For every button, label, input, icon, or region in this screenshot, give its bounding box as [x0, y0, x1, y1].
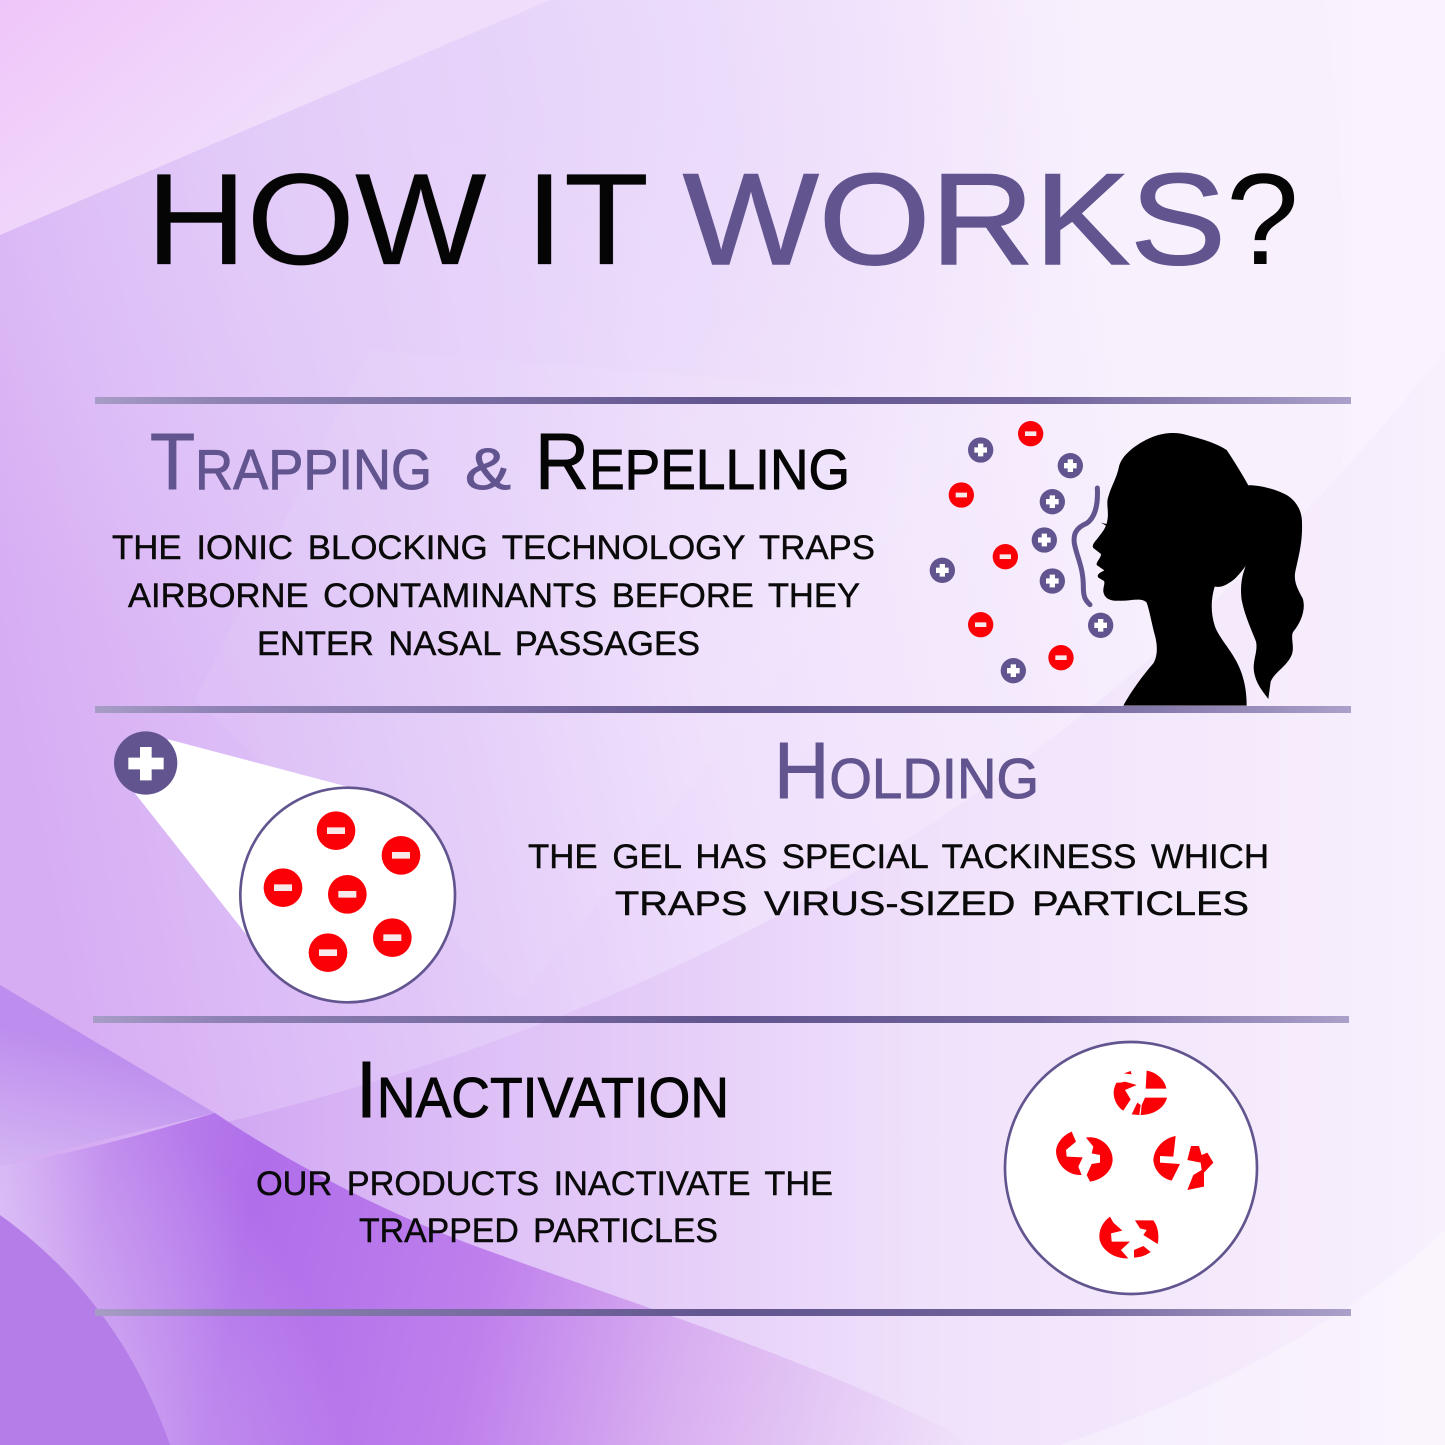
- particles: negative charges: [949, 421, 1074, 670]
- containing circle: [1005, 1042, 1257, 1294]
- title: [146, 146, 1299, 292]
- divider 1: [95, 397, 1351, 404]
- panel: trapping and repelling: [112, 417, 1304, 706]
- heading: holding: HOLDING: [774, 726, 1039, 815]
- text block: gel description: THE GEL HAS SPECIAL TACKINESS WHICH: [528, 838, 1269, 876]
- fragments: right particle: [1153, 1136, 1213, 1190]
- panel: inactivation: [256, 1042, 1257, 1294]
- icon: large positive charge: [114, 731, 177, 795]
- divider 2: [95, 706, 1351, 713]
- illustration: broken particles: [1005, 1042, 1257, 1294]
- heading: trapping and repelling: TRAPPING: [150, 417, 432, 506]
- text block: ionic blocking description: [112, 529, 875, 663]
- text block: ionic blocking description: AIRBORNE CONTAMINANTS BEFORE THEY: [128, 577, 860, 615]
- magnifier cone: [135, 739, 350, 935]
- heading: trapping and repelling: REPELLING: [535, 417, 850, 506]
- divider 3: [93, 1016, 1349, 1023]
- title: HOW IT: [146, 146, 649, 292]
- heading: trapping and repelling: &: [465, 437, 511, 502]
- fragments: top particle: [1114, 1071, 1167, 1115]
- icon: breath barrier curve: [1074, 488, 1097, 605]
- text block: inactivation description: [256, 1165, 833, 1250]
- particles: positive charges: [930, 437, 1113, 683]
- fragments: bottom particle: [1099, 1217, 1158, 1258]
- title: WORKS: [683, 146, 1226, 292]
- title: ?: [1226, 146, 1299, 292]
- illustration: charged particles and woman silhouette: [930, 421, 1304, 706]
- illustration: magnified positive charge: [114, 731, 455, 1002]
- magnified circle: [240, 788, 455, 1002]
- text block: ionic blocking description: THE IONIC BLOCKING TECHNOLOGY TRAPS: [112, 529, 875, 567]
- divider 4: [95, 1309, 1351, 1316]
- text block: ionic blocking description: ENTER NASAL PASSAGES: [257, 625, 700, 663]
- text block: gel description: [528, 838, 1269, 923]
- text block: inactivation description: TRAPPED PARTICLES: [359, 1212, 718, 1250]
- panel: holding: [114, 726, 1269, 1002]
- text block: gel description: TRAPS VIRUS-SIZED PARTICLES: [615, 885, 1249, 923]
- heading: inactivation: INACTIVATION: [356, 1045, 729, 1134]
- fragments: left particle: [1056, 1132, 1113, 1182]
- heading: trapping and repelling: [150, 417, 850, 506]
- icon: woman silhouette: [1093, 433, 1304, 706]
- text block: inactivation description: OUR PRODUCTS INACTIVATE THE: [256, 1165, 833, 1203]
- negative particles inside circle: [264, 811, 420, 972]
